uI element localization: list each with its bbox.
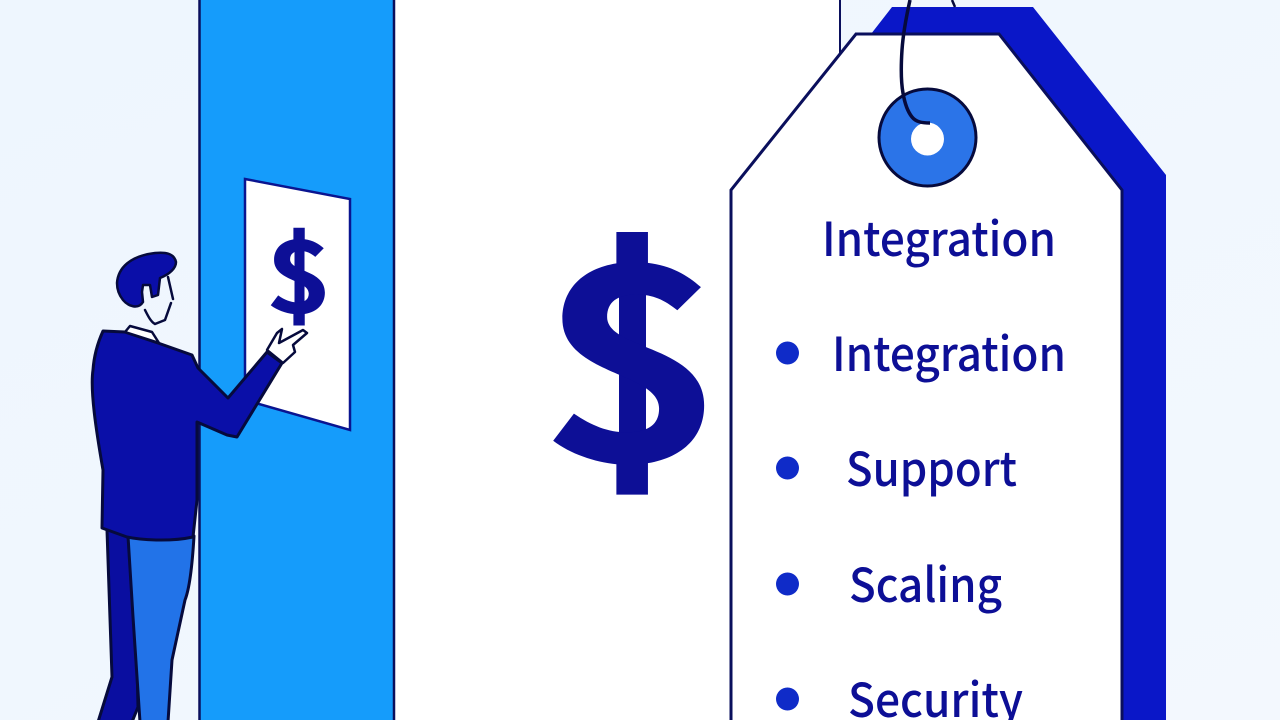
tag eyelet: [879, 89, 976, 186]
panel: blue column: [200, 0, 394, 720]
string back: [952, 0, 955, 7]
icon: large dollar sign: $: [538, 148, 726, 540]
list item: Scaling: [776, 547, 1002, 616]
list item: Scaling: Scaling: [849, 547, 1002, 616]
tag body: [731, 34, 1122, 720]
figure: man pointing at poster: [92, 253, 307, 720]
collar: [125, 326, 159, 343]
list item: Security: [776, 662, 1023, 720]
front leg: [128, 536, 194, 720]
icon: small dollar sign: $: [265, 197, 333, 343]
jacket and arm: [92, 331, 282, 540]
panel: poster with dollar sign: [245, 179, 350, 430]
face line: [145, 277, 173, 324]
tag shadow: [871, 7, 1166, 720]
panel: white center wall: [394, 0, 840, 720]
list item: Support: Support: [846, 431, 1017, 500]
tag heading: Integration: [822, 201, 1056, 270]
hand: [267, 329, 307, 363]
panel: price tag: [731, 0, 1166, 720]
list item: Integration: Integration: [832, 316, 1066, 385]
hair: [117, 253, 176, 306]
list item: Support: [776, 431, 1017, 500]
back leg: [98, 530, 138, 720]
string: [901, 0, 930, 123]
